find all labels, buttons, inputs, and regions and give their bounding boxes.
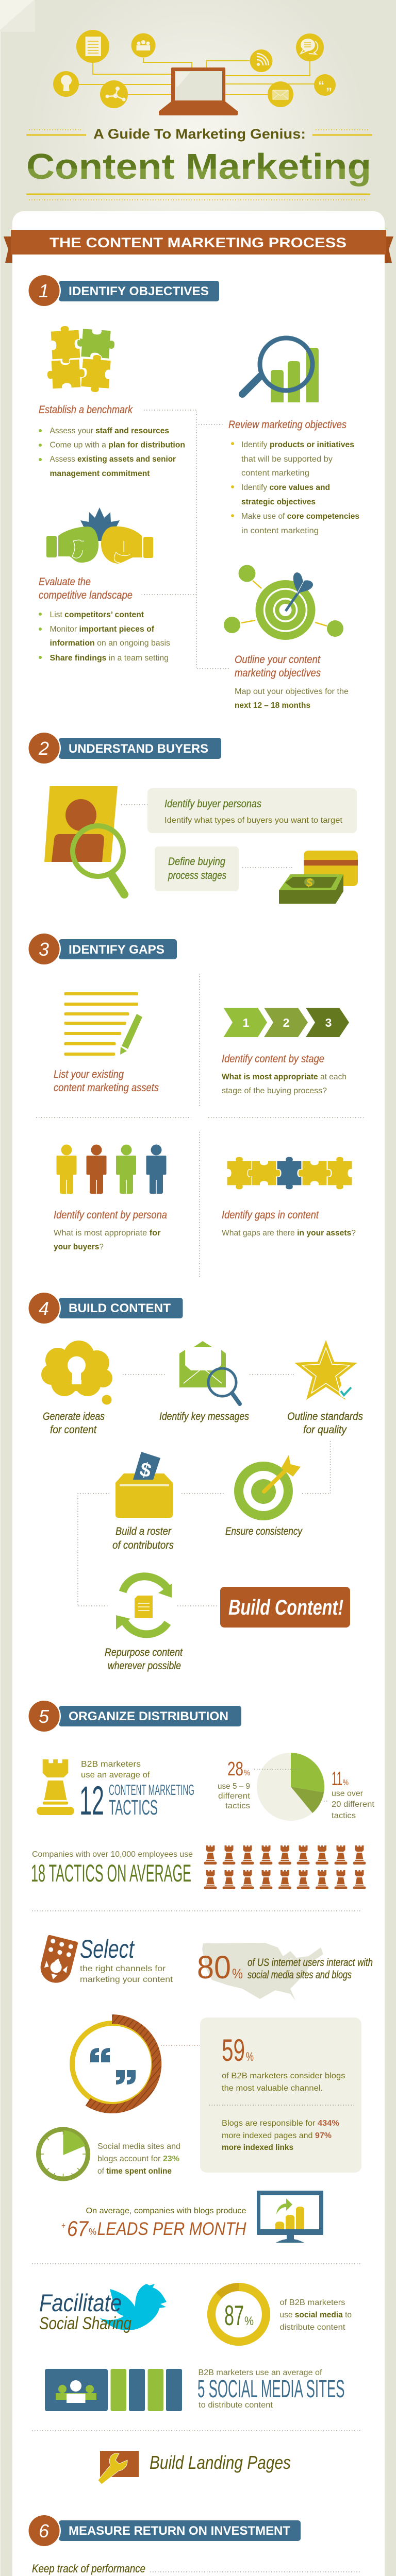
panel: blogs stats: the most valuable channel. — [222, 2084, 323, 2093]
text: identify content by stage: What is most appropriate at each — [222, 1073, 346, 1081]
icon: rss — [250, 49, 272, 72]
text: evaluate the competitive landscape: Evaluate the — [39, 576, 91, 588]
section 2 heading — [28, 732, 221, 765]
stat: 18 tactics on average: Companies with over 10,000 employees use — [32, 1850, 193, 1859]
text: establish a benchmark — [39, 404, 185, 478]
icon: target with arrow — [239, 1455, 301, 1516]
callout: identify buyer personas — [121, 788, 357, 833]
stat: 5 social media sites — [197, 2368, 344, 2410]
text: social media time: blogs account for 23% — [97, 2155, 179, 2163]
text: list your existing assets: content marketing assets — [54, 1082, 159, 1094]
text: establish a benchmark: Establish a benchmark — [39, 404, 133, 416]
text: review marketing objectives: strategic objectives — [241, 498, 316, 506]
stat: 12 content marketing tactics: B2B marketers — [81, 1760, 141, 1769]
stat: 11 percent: 11 — [332, 1768, 342, 1790]
section 6 heading: 6 — [39, 2520, 50, 2541]
icon: three stage chevrons: 2 — [283, 1016, 289, 1029]
icon: quotation marks: “ — [318, 79, 324, 93]
panel: blogs stats: Blogs are responsible for 434% — [222, 2119, 339, 2128]
labels: second row: of contributors — [112, 1539, 174, 1551]
labels: first row — [43, 1411, 363, 1436]
text: review marketing objectives: in content marketing — [241, 527, 319, 535]
icon: magnifier over bars — [242, 338, 319, 402]
text: establish a benchmark: Come up with a plan for distribution — [50, 441, 185, 449]
section 1 heading: 1 — [39, 280, 49, 301]
stat: 28 percent: % — [244, 1769, 250, 1777]
map: United States — [202, 1943, 323, 2001]
section 5 heading: 5 — [39, 1706, 50, 1727]
label: repurpose content: Repurpose content — [105, 1647, 183, 1658]
labels: first row: Identify key messages — [159, 1411, 249, 1422]
label: repurpose content — [105, 1647, 183, 1672]
icon: contribution box — [116, 1452, 173, 1518]
heading: build landing pages: Build Landing Pages — [150, 2452, 291, 2473]
icon: wrench — [98, 2451, 139, 2484]
stat: 12 content marketing tactics: TACTICS — [109, 1795, 158, 1819]
text: outline your content marketing objectives: next 12 – 18 months — [235, 701, 310, 710]
text: list your existing assets — [54, 1069, 159, 1094]
icon: three stage chevrons: 1 — [243, 1016, 250, 1029]
text: identify gaps in content: What gaps are there in your assets? — [222, 1229, 356, 1238]
text: establish a benchmark: management commitment — [50, 469, 150, 478]
text: review marketing objectives: that will be supported by — [241, 455, 333, 464]
text: evaluate the competitive landscape: information on an ongoing basis — [50, 639, 170, 648]
icon: persona with magnifier — [44, 786, 124, 894]
text: identify content by stage: Identify content by stage — [222, 1053, 324, 1065]
stat: 28 percent: tactics — [225, 1802, 250, 1810]
labels: second row: Build a roster — [116, 1526, 172, 1537]
text: select the right channels — [80, 1935, 173, 1984]
text: review marketing objectives: content marketing — [241, 469, 309, 478]
label: repurpose content: wherever possible — [108, 1660, 181, 1672]
labels: first row: for quality — [303, 1424, 347, 1436]
text: evaluate the competitive landscape — [39, 576, 170, 663]
stat: 28 percent — [218, 1758, 251, 1810]
chart: blog ring with quote marks — [72, 2014, 214, 2113]
section 4 heading: 4 — [39, 1298, 49, 1319]
text: social media time — [97, 2142, 180, 2176]
text: outline your content marketing objectives: marketing objectives — [235, 667, 321, 679]
stat: 18 tactics on average: 18 TACTICS ON AVERAGE — [31, 1859, 191, 1887]
text: review marketing objectives — [228, 419, 359, 535]
ribbon heading: THE CONTENT MARKETING PROCESS — [50, 235, 346, 250]
ribbon heading — [4, 230, 393, 263]
icon: envelope — [268, 81, 293, 107]
subheading: keep track of performance: Keep track of performance — [32, 2562, 145, 2575]
stat: 80 percent — [197, 1950, 373, 1986]
chart: 87 percent ring — [211, 2287, 266, 2342]
icon: puzzle row — [227, 1157, 352, 1190]
stat: 28 percent: different — [218, 1792, 251, 1801]
stat: 11 percent: 20 different — [332, 1800, 375, 1809]
stat: 28 percent: use 5 – 9 — [218, 1782, 250, 1791]
text: establish a benchmark: Assess your staff and resources — [50, 427, 169, 435]
section 6 heading — [28, 2514, 301, 2547]
section 1 heading — [28, 274, 219, 307]
icon: monitor with growth chart — [257, 2191, 323, 2243]
heading: facilitate social sharing: Social Sharing — [39, 2314, 131, 2333]
icon: clock — [38, 2129, 88, 2179]
labels: first row: Outline standards — [287, 1411, 363, 1422]
stat: plus 67 percent leads per month — [61, 2207, 246, 2241]
text: select the right channels: Select — [80, 1935, 135, 1963]
callout: define buying process stages: Define buying — [168, 856, 225, 868]
callout: identify buyer personas: Identify buyer personas — [164, 798, 261, 810]
icon: star with check — [294, 1340, 357, 1400]
icon: contribution box: $ — [138, 1459, 153, 1482]
icon: idea cloud — [41, 1341, 112, 1404]
icon: puzzle — [46, 325, 116, 394]
heading: facilitate social sharing: Facilitate — [39, 2289, 122, 2316]
section 4 heading: BUILD CONTENT — [69, 1301, 171, 1315]
stat: 11 percent: use over — [332, 1789, 364, 1798]
connector dots — [78, 1375, 330, 1606]
stat: 5 social media sites: to distribute content — [199, 2401, 273, 2410]
icon: list with pencil — [64, 992, 142, 1056]
stat: 11 percent: % — [343, 1778, 349, 1787]
stat: 5 social media sites: B2B marketers use an average of — [198, 2368, 322, 2377]
labels: first row: Generate ideas — [43, 1411, 105, 1422]
icon: laptop — [159, 67, 238, 115]
labels: first row: for content — [50, 1424, 97, 1436]
subtitle: A Guide To Marketing Genius: — [93, 126, 306, 142]
text: social media time: Social media sites and — [97, 2142, 180, 2151]
stat: 18 tactics on average — [31, 1850, 193, 1887]
icon: target with dart — [224, 565, 343, 640]
stat: plus 67 percent leads per month: On average, companies with blogs produce — [86, 2207, 246, 2215]
icon: network — [100, 80, 128, 108]
stat: 11 percent: tactics — [332, 1811, 356, 1820]
section 6 heading: MEASURE RETURN ON INVESTMENT — [69, 2524, 290, 2538]
text: evaluate the competitive landscape: List competitors’ content — [50, 611, 144, 619]
text: review marketing objectives: Identify products or initiatives — [241, 440, 354, 449]
panel: blogs stats: % — [246, 2050, 254, 2064]
text: identify content by persona: Identify content by persona — [54, 1209, 167, 1221]
stat: 11 percent — [332, 1768, 375, 1820]
text: review marketing objectives: Identify core values and — [241, 483, 330, 492]
icon: chat — [296, 33, 324, 61]
icon: four personas — [57, 1145, 166, 1194]
text: review marketing objectives: Review marketing objectives — [228, 419, 346, 431]
icon: credit card and cash — [279, 851, 358, 904]
labels: second row: Ensure consistency — [225, 1526, 303, 1537]
stat: 28 percent: 28 — [227, 1758, 243, 1780]
folded corner — [0, 0, 35, 32]
icon: document — [76, 30, 109, 63]
text: social media time: of time spent online — [97, 2167, 172, 2176]
text: evaluate the competitive landscape: Monitor important pieces of — [50, 625, 155, 634]
chart: 87 percent ring: 87 — [224, 2299, 244, 2331]
stat: plus 67 percent leads per month: % — [89, 2227, 96, 2237]
stat: 12 content marketing tactics: 12 — [79, 1777, 104, 1823]
stat: plus 67 percent leads per month: LEADS PER MONTH — [97, 2219, 246, 2239]
panel: blogs stats — [200, 2018, 361, 2173]
panel: blogs stats: more indexed pages and 97% — [222, 2131, 332, 2140]
stat: 12 content marketing tactics: use an average of — [81, 1771, 150, 1780]
icon: five social bars with people — [45, 2369, 182, 2411]
chart: tactics pie — [254, 1753, 328, 1821]
text: social media use — [279, 2298, 352, 2332]
labels: second row — [112, 1526, 303, 1551]
icon: quotation marks — [314, 74, 336, 99]
icon: three stage chevrons — [224, 1008, 349, 1037]
section 5 heading — [28, 1700, 241, 1733]
stat: plus 67 percent leads per month: + — [61, 2221, 65, 2231]
connector dots — [141, 410, 229, 669]
section 2 heading: UNDERSTAND BUYERS — [69, 742, 208, 756]
panel: blogs stats: more indexed links — [222, 2143, 293, 2152]
section 3 heading: IDENTIFY GAPS — [69, 943, 164, 957]
section 4 heading — [28, 1292, 183, 1325]
stat: 80 percent: 80 — [197, 1950, 231, 1986]
stat: 80 percent: social media sites and blogs — [248, 1969, 352, 1981]
section 3 heading: 3 — [39, 939, 49, 960]
text: identify content by stage: stage of the buying process? — [222, 1087, 327, 1095]
text: identify content by stage — [222, 1053, 346, 1095]
text: evaluate the competitive landscape: Share findings in a team setting — [50, 654, 169, 663]
chart: 87 percent ring: % — [244, 2314, 254, 2328]
text: social media use: of B2B marketers — [279, 2298, 345, 2307]
stat: 12 content marketing tactics — [79, 1760, 194, 1823]
text: outline your content marketing objectives: Map out your objectives for the — [235, 687, 349, 696]
title — [26, 146, 371, 200]
stat: plus 67 percent leads per month: 67 — [67, 2216, 89, 2241]
callout: build content: Build Content! — [228, 1595, 343, 1619]
icon: rows of rooks — [204, 1845, 366, 1889]
callout: identify buyer personas: Identify what types of buyers you want to target — [164, 816, 343, 825]
text: outline your content marketing objectives — [235, 654, 349, 710]
text: outline your content marketing objectives: Outline your content — [235, 654, 321, 666]
section 1 heading: IDENTIFY OBJECTIVES — [69, 284, 209, 298]
icon: boxing gloves — [46, 507, 153, 564]
text: identify content by persona — [54, 1209, 167, 1251]
text: identify gaps in content — [222, 1209, 356, 1238]
icon: three stage chevrons: 3 — [325, 1016, 332, 1029]
panel: blogs stats: of B2B marketers consider blogs — [222, 2072, 345, 2080]
text: identify content by persona: your buyers? — [54, 1243, 104, 1251]
icon: people — [131, 33, 156, 58]
text: select the right channels: the right channels for — [80, 1964, 166, 1973]
callout: build content — [220, 1587, 350, 1628]
icon: credit card and cash: $ — [306, 876, 313, 889]
text: list your existing assets: List your existing — [54, 1069, 124, 1080]
stat: 12 content marketing tactics: CONTENT MARKETING — [109, 1782, 194, 1799]
icon: quotation marks: ” — [326, 86, 332, 99]
text: select the right channels: marketing your content — [80, 1975, 173, 1984]
icon: repurpose arrows — [116, 1577, 172, 1634]
text: social media use: use social media to — [279, 2311, 352, 2319]
callout: define buying process stages — [155, 846, 293, 891]
text: establish a benchmark: Assess existing assets and senior — [50, 455, 176, 464]
header network illustration — [53, 30, 336, 115]
icon: envelope with magnifier — [179, 1341, 240, 1404]
subtitle — [26, 126, 372, 142]
text: identify content by persona: What is most appropriate for — [54, 1229, 161, 1238]
title: Content Marketing — [26, 146, 371, 187]
icon: large rook — [37, 1759, 74, 1815]
text: identify gaps in content: Identify gaps in content — [222, 1209, 319, 1221]
stat: 80 percent: % — [232, 1966, 243, 1981]
icon: social bird — [100, 2284, 167, 2330]
icon: lightbulb — [53, 71, 79, 97]
section 5 heading: ORGANIZE DISTRIBUTION — [69, 1709, 228, 1723]
section 3 heading — [28, 933, 177, 965]
text: evaluate the competitive landscape: competitive landscape — [39, 589, 133, 601]
callout: define buying process stages: process stages — [168, 870, 226, 882]
panel: blogs stats: 59 — [222, 2033, 245, 2067]
text: review marketing objectives: Make use of core competencies — [241, 512, 359, 521]
text: social media use: distribute content — [279, 2323, 345, 2332]
section 2 heading: 2 — [38, 738, 49, 759]
heading: facilitate social sharing — [39, 2289, 131, 2333]
icon: remote control — [37, 1935, 78, 1986]
